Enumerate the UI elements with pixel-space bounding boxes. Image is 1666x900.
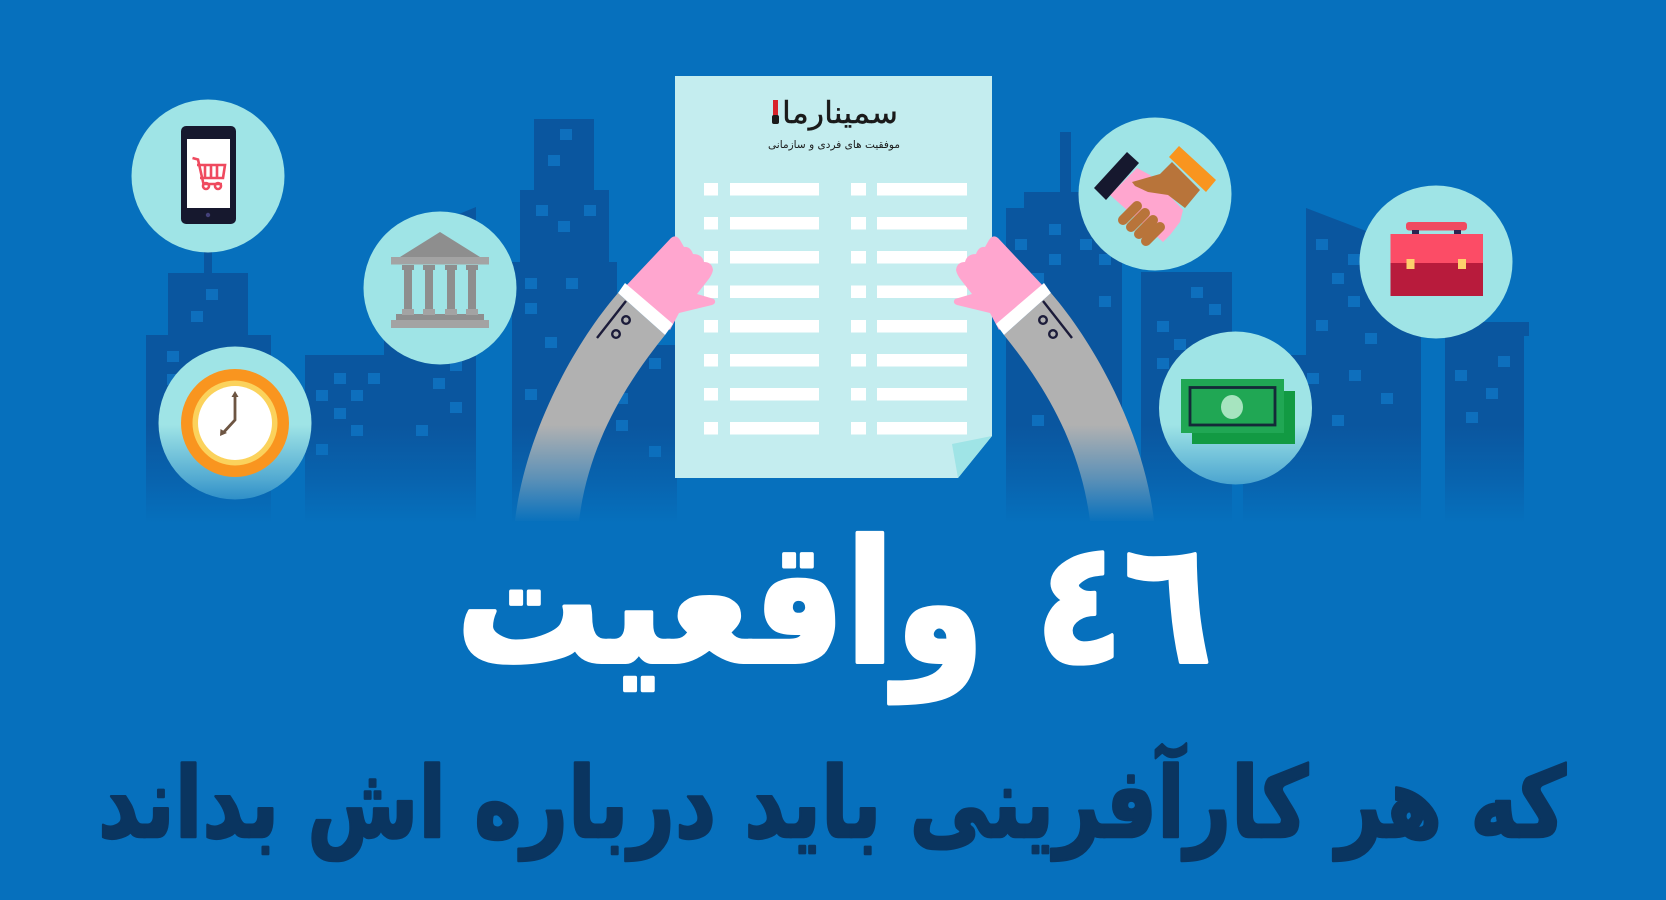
icon: money bbox=[1181, 379, 1295, 444]
left hand and cuff bbox=[597, 236, 715, 338]
icon circle backgrounds bbox=[132, 100, 1512, 500]
icon: bank building bbox=[391, 232, 489, 328]
title: ٤٦ واقعیت bbox=[456, 505, 1212, 704]
right hand and cuff bbox=[954, 236, 1072, 338]
page fold bbox=[952, 436, 992, 478]
icon: handshake bbox=[1094, 146, 1216, 242]
sleeves bbox=[515, 293, 1154, 521]
icon: clock bbox=[181, 369, 289, 477]
document page bbox=[675, 76, 992, 478]
logo: سمینارما bbox=[782, 96, 898, 131]
list rows bbox=[704, 183, 967, 434]
city skyline bbox=[146, 119, 1529, 522]
icon: phone with cart bbox=[181, 126, 236, 224]
icon: briefcase bbox=[1390, 222, 1483, 296]
tagline: موفقیت های فردی و سازمانی bbox=[768, 139, 900, 151]
